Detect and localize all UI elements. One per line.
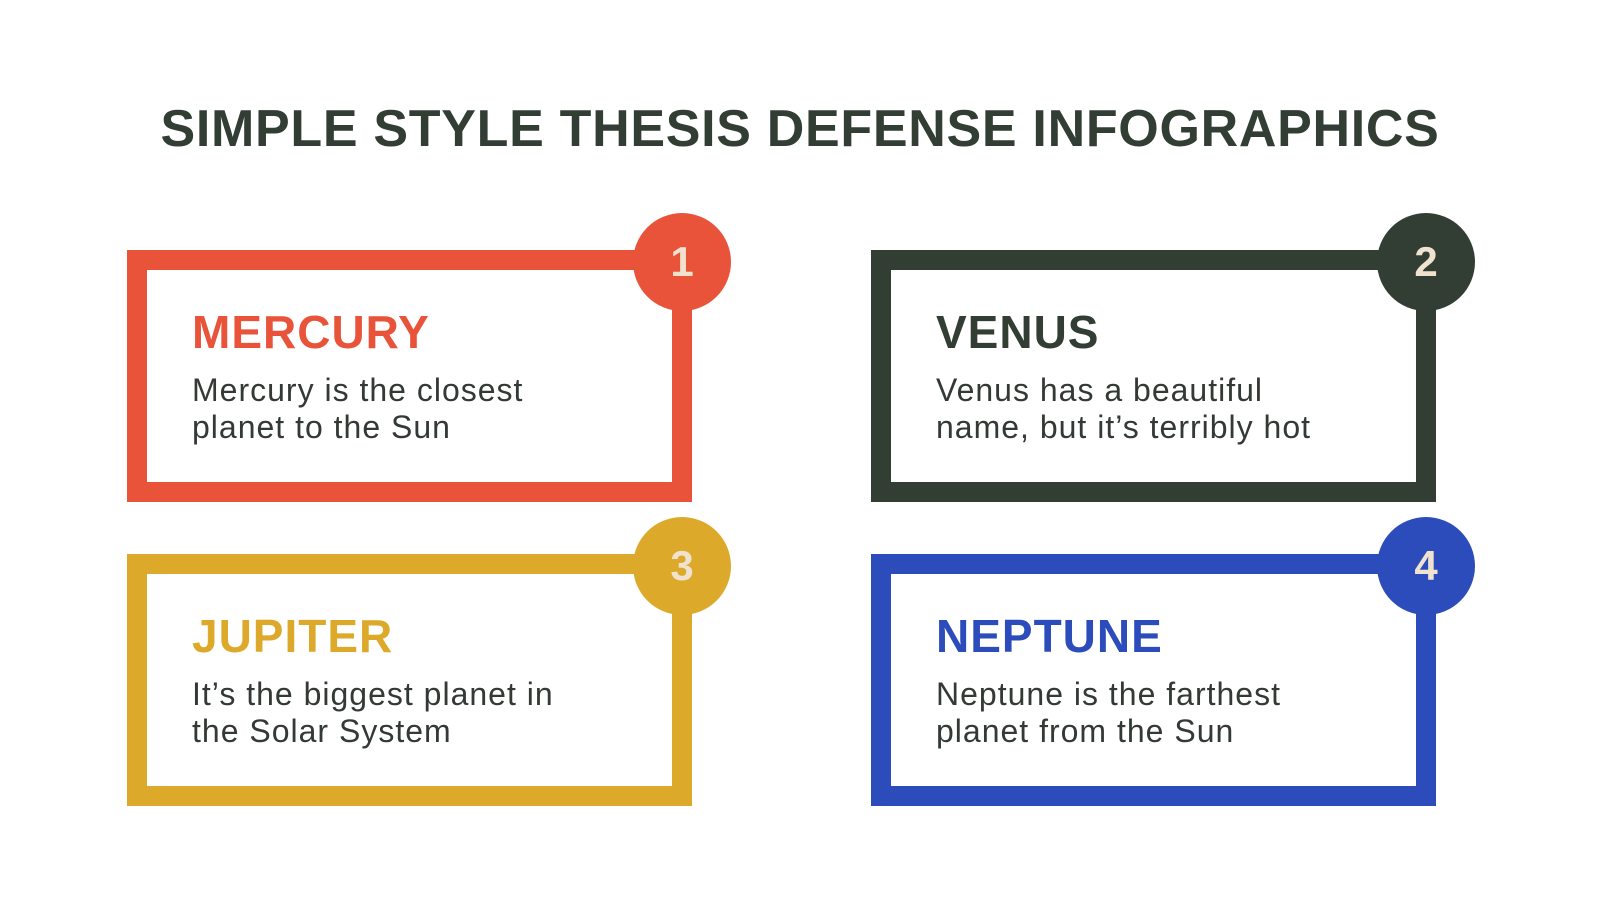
text: jupiter: the Solar System xyxy=(192,713,452,749)
title: SIMPLE STYLE THESIS DEFENSE INFOGRAPHICS xyxy=(160,100,1440,158)
badge 3: 3 xyxy=(670,542,694,589)
heading: mercury: MERCURY xyxy=(192,306,430,358)
text: jupiter: It’s the biggest planet in xyxy=(192,676,554,712)
text: mercury: planet to the Sun xyxy=(192,409,451,445)
badge 2 xyxy=(1377,213,1475,311)
panel: jupiter xyxy=(127,554,692,806)
text: neptune xyxy=(936,676,1281,749)
badge 1: 1 xyxy=(670,238,694,285)
heading: jupiter: JUPITER xyxy=(192,610,393,662)
badge 1 xyxy=(633,213,731,311)
panel: mercury xyxy=(127,250,692,502)
heading: venus: VENUS xyxy=(936,306,1099,358)
text: neptune: planet from the Sun xyxy=(936,713,1234,749)
badge 2: 2 xyxy=(1414,238,1438,285)
heading: neptune: NEPTUNE xyxy=(936,610,1163,662)
text: venus: Venus has a beautiful xyxy=(936,372,1263,408)
text: neptune: Neptune is the farthest xyxy=(936,676,1281,712)
badge 3 xyxy=(633,517,731,615)
text: venus: name, but it’s terribly hot xyxy=(936,409,1311,445)
text: mercury: Mercury is the closest xyxy=(192,372,523,408)
panel: venus xyxy=(871,250,1436,502)
text: jupiter xyxy=(192,676,554,749)
badge 4: 4 xyxy=(1414,542,1438,589)
text: mercury xyxy=(192,372,523,445)
text: venus xyxy=(936,372,1311,445)
panel: neptune xyxy=(871,554,1436,806)
badge 4 xyxy=(1377,517,1475,615)
